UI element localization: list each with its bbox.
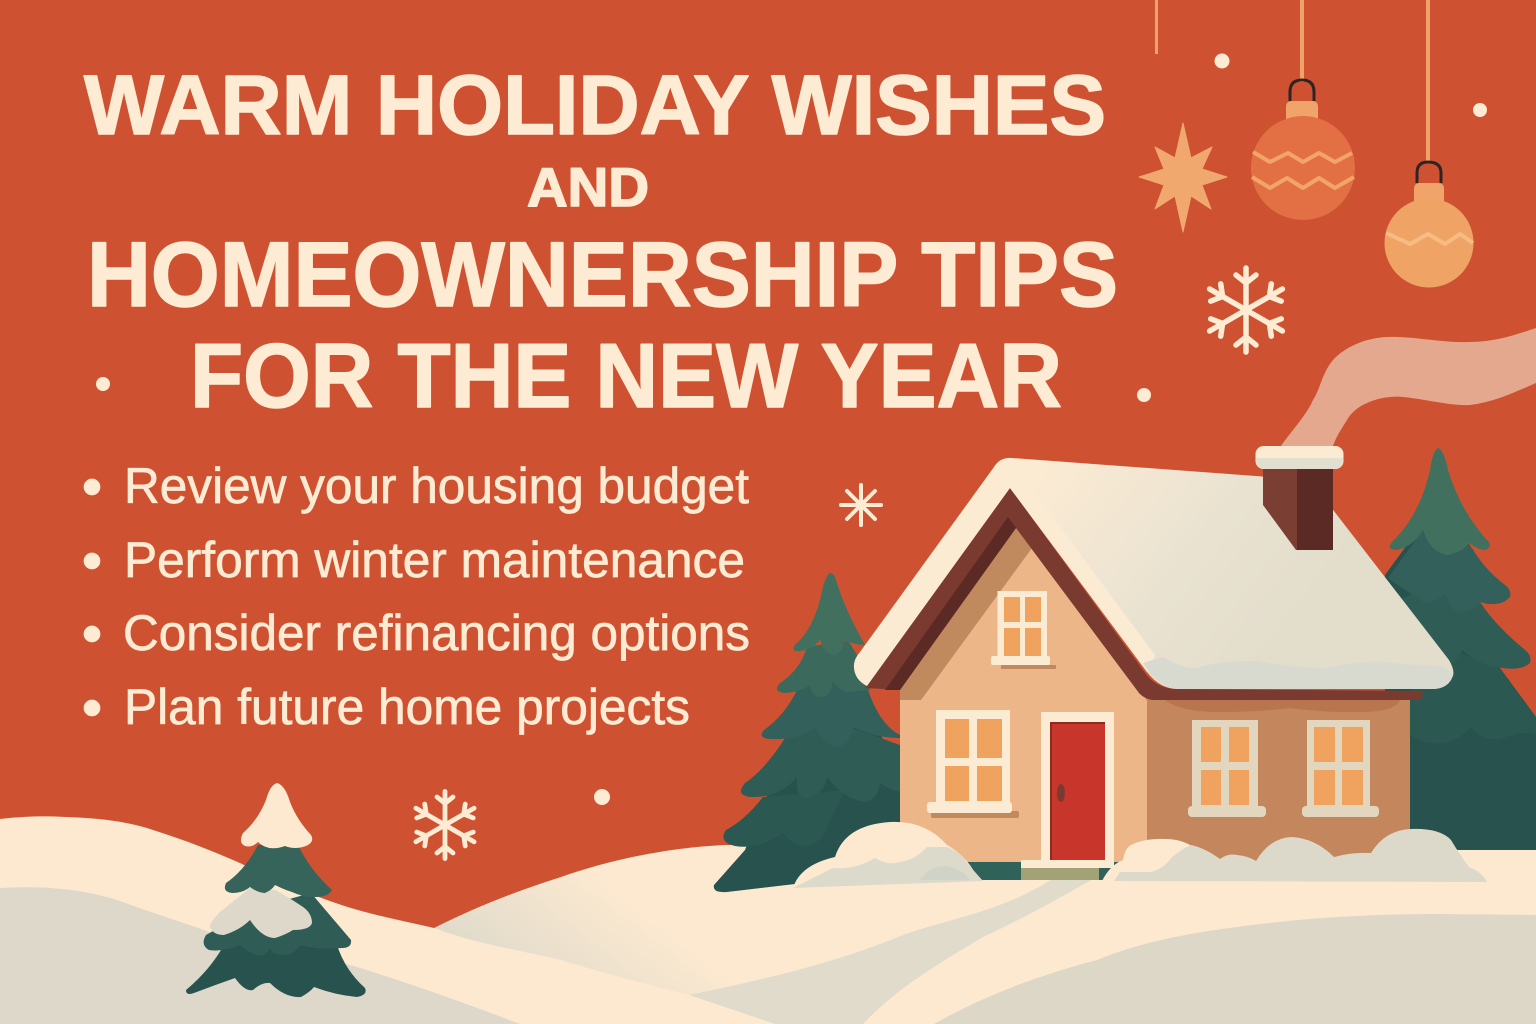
title line 2: AND xyxy=(527,156,649,218)
tier two xyxy=(777,640,870,697)
top tier xyxy=(1390,448,1490,555)
tree: foreground small xyxy=(186,783,366,997)
roof snow highlight xyxy=(1010,484,1155,672)
side wall xyxy=(1147,695,1410,881)
snow dots xyxy=(96,54,1487,805)
gable shadow xyxy=(900,528,1032,700)
middle tier xyxy=(204,893,351,956)
front window xyxy=(927,710,1019,818)
trunk mass xyxy=(1385,520,1536,850)
title line 4: FOR THE NEW YEAR xyxy=(190,326,1062,427)
front snow ground xyxy=(700,880,1536,1024)
tree: right of house xyxy=(1385,448,1536,850)
snow cap xyxy=(241,783,312,848)
snow bush left xyxy=(793,822,983,888)
walkway xyxy=(689,880,1091,1024)
roof fascia xyxy=(865,488,1423,700)
gable window xyxy=(991,591,1056,669)
front wall xyxy=(900,528,1147,862)
left cream hill xyxy=(0,816,775,1024)
middle tier xyxy=(1400,580,1530,680)
house xyxy=(854,446,1453,882)
title line 1: WARM HOLIDAY WISHES xyxy=(84,58,1106,152)
snow bush right xyxy=(1102,829,1487,882)
trunk mass xyxy=(714,640,900,892)
base strip xyxy=(960,858,1125,882)
left grey hill xyxy=(0,887,520,1024)
top tier xyxy=(793,573,865,655)
icon: star xyxy=(1139,123,1227,232)
tier five xyxy=(723,790,845,847)
chimney smoke xyxy=(1281,328,1536,446)
tips list xyxy=(84,458,750,735)
right foreground hill xyxy=(934,914,1536,1024)
tree: left of house xyxy=(714,573,900,892)
side window right xyxy=(1302,720,1379,817)
title line 3: HOMEOWNERSHIP TIPS xyxy=(87,224,1118,326)
tip 1: Review your housing budget xyxy=(124,458,749,514)
lower tier xyxy=(1410,650,1536,743)
chimney xyxy=(1256,446,1344,550)
tier four xyxy=(741,720,900,802)
icon: snowflake lower xyxy=(412,791,478,859)
side window left xyxy=(1188,720,1266,817)
back snow hill xyxy=(434,845,1536,1024)
eave shadow xyxy=(1165,700,1400,712)
bottom tier xyxy=(186,945,366,997)
icon: snowflake upper xyxy=(1205,268,1287,352)
title xyxy=(84,58,1118,427)
ornament: amber bauble xyxy=(1384,0,1474,288)
upper tier xyxy=(225,845,332,897)
tier three xyxy=(762,670,900,747)
ornament: coral bauble xyxy=(1251,0,1355,220)
tip 2: Perform winter maintenance xyxy=(124,532,745,588)
upper tier xyxy=(1388,530,1510,613)
hanging line xyxy=(1155,0,1158,54)
roof snow shadow xyxy=(1143,657,1453,689)
snowy tier xyxy=(210,888,312,938)
fascia shade xyxy=(885,517,1016,690)
tip 4: Plan future home projects xyxy=(124,679,690,735)
roof snow xyxy=(854,458,1453,689)
tip 3: Consider refinancing options xyxy=(123,605,750,661)
front door xyxy=(1021,712,1114,880)
icon: sparkle xyxy=(841,485,881,525)
